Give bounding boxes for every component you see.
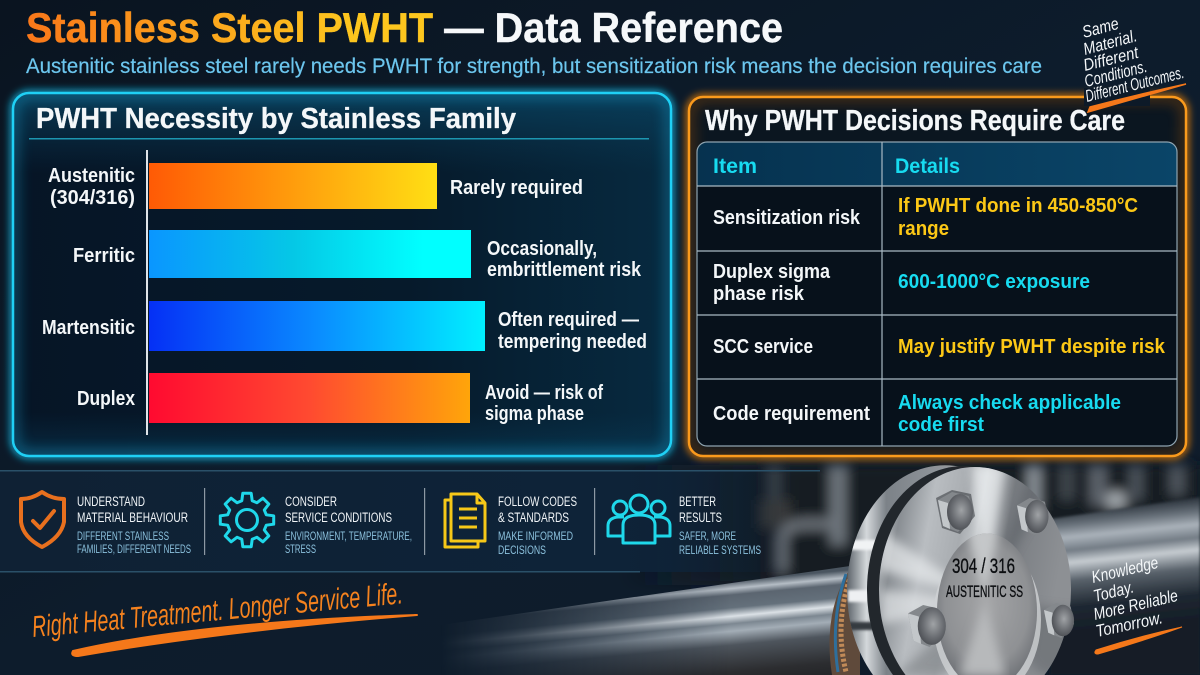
item: consider: SERVICE CONDITIONS [285, 510, 392, 525]
bar: Duplex [77, 373, 603, 425]
row: duplex sigma: phase risk [713, 283, 805, 305]
item: understand: UNDERSTAND [77, 494, 145, 509]
note: same material: Conditions. [1082, 57, 1149, 91]
row: sensitization [713, 195, 1138, 240]
note: same material: Material. [1081, 26, 1139, 59]
rear flange [847, 465, 1043, 675]
icon: shield [21, 492, 64, 547]
note: knowledge today: Tomorrow. [1094, 608, 1164, 641]
item: follow codes: & STANDARDS [498, 510, 569, 525]
row: SCC service [713, 336, 1166, 358]
row: sensitization: range [898, 218, 949, 240]
row: code requirement [713, 392, 1121, 436]
bar: Austenitic: (304/316) [50, 187, 135, 209]
left pipe [440, 566, 850, 675]
note underline [1088, 84, 1186, 112]
icon: people [608, 495, 670, 543]
flange marking: 304 / 316 [952, 555, 1015, 578]
bar: Austenitic: Rarely required [450, 177, 583, 199]
bar: Martensitic: Often required — [498, 309, 639, 331]
item: follow codes: DECISIONS [498, 545, 546, 557]
item: understand: DIFFERENT STAINLESS [77, 531, 169, 543]
item: understand: MATERIAL BEHAVIOUR [77, 510, 188, 525]
item: follow codes: MAKE INFORMED [498, 531, 573, 543]
slogan [31, 577, 417, 656]
item: follow codes: FOLLOW CODES [498, 494, 577, 509]
photo: stainless pipe and flange [440, 465, 1200, 675]
row: code requirement: Always check applicable [898, 392, 1121, 414]
panel: PWHT necessity [13, 93, 671, 456]
bar: Duplex: sigma phase [485, 403, 584, 425]
note: knowledge today [1090, 553, 1182, 654]
bolt [1017, 498, 1048, 535]
bottom takeaway strip [0, 470, 820, 572]
panel: why decisions require care [689, 97, 1186, 456]
item: consider: STRESS [285, 544, 316, 556]
row: code requirement: Code requirement [713, 403, 870, 425]
note: knowledge today: Today. [1091, 578, 1136, 606]
bolt [908, 605, 946, 647]
flange marking [946, 555, 1023, 601]
bar: Martensitic: Martensitic [42, 317, 135, 339]
row: sensitization: Sensitization risk [713, 207, 861, 229]
item: consider [285, 494, 412, 556]
item: consider: ENVIRONMENT, TEMPERATURE, [285, 531, 412, 543]
blurred plant background [620, 465, 1200, 585]
bar: Ferritic: Ferritic [73, 245, 135, 267]
row: duplex sigma: Duplex sigma [713, 261, 831, 283]
subtitle: Austenitic stainless steel rarely needs PWHT for strength, but sensitization risk means the decision requires care [26, 55, 1042, 78]
icon: gear [220, 493, 274, 547]
note: same material: Same [1080, 14, 1121, 42]
title: Stainless Steel PWHT — Data Reference [26, 4, 783, 51]
table [697, 142, 1177, 446]
slogan: Right Heat Treatment. Longer Service Life. [31, 577, 404, 644]
icon: documents [445, 494, 485, 547]
row: SCC service: SCC service [713, 336, 813, 358]
row: duplex sigma [713, 261, 1090, 305]
bar: Ferritic [73, 230, 642, 281]
item: better results: RESULTS [679, 510, 722, 525]
bar: Austenitic: Austenitic [48, 165, 135, 187]
table header: Details [895, 155, 960, 178]
row: sensitization: If PWHT done in 450-850°C [898, 195, 1138, 217]
row: code requirement: code first [898, 414, 984, 436]
bar: Austenitic [48, 163, 583, 209]
bolt [936, 490, 975, 534]
right pipe [1050, 497, 1200, 675]
flange marking: AUSTENITIC SS [946, 582, 1023, 601]
note: same material: Different [1081, 43, 1141, 75]
note underline [1095, 627, 1182, 654]
bar: Duplex: Avoid — risk of [485, 382, 603, 404]
item: better results: BETTER [679, 494, 716, 509]
table header [713, 155, 960, 178]
bar: Ferritic: Occasionally, [487, 238, 597, 260]
bolt [1044, 603, 1074, 638]
panel heading: PWHT Necessity by Stainless Family [36, 103, 516, 135]
table header: Item [713, 155, 757, 178]
flange face [879, 467, 1071, 675]
row: SCC service: May justify PWHT despite risk [898, 336, 1166, 358]
note: knowledge today: More Reliable [1092, 586, 1180, 624]
bar: Duplex: Duplex [77, 388, 135, 410]
centre plate [933, 542, 1041, 675]
note: same material [1080, 14, 1186, 112]
item: consider: CONSIDER [285, 494, 337, 509]
bar: Ferritic: embrittlement risk [487, 259, 642, 281]
item: understand [77, 494, 191, 556]
item: better results: SAFER, MORE [679, 531, 736, 543]
panel heading: Why PWHT Decisions Require Care [705, 105, 1125, 137]
item: understand: FAMILIES, DIFFERENT NEEDS [77, 544, 191, 556]
item: better results [679, 494, 761, 557]
item: better results: RELIABLE SYSTEMS [679, 545, 761, 557]
item: follow codes [498, 494, 577, 557]
note: knowledge today: Knowledge [1090, 553, 1160, 587]
bar: Martensitic: tempering needed [498, 331, 647, 353]
row: duplex sigma: 600-1000°C exposure [898, 271, 1090, 293]
bar: Martensitic [42, 301, 647, 353]
weld bead [830, 566, 860, 675]
